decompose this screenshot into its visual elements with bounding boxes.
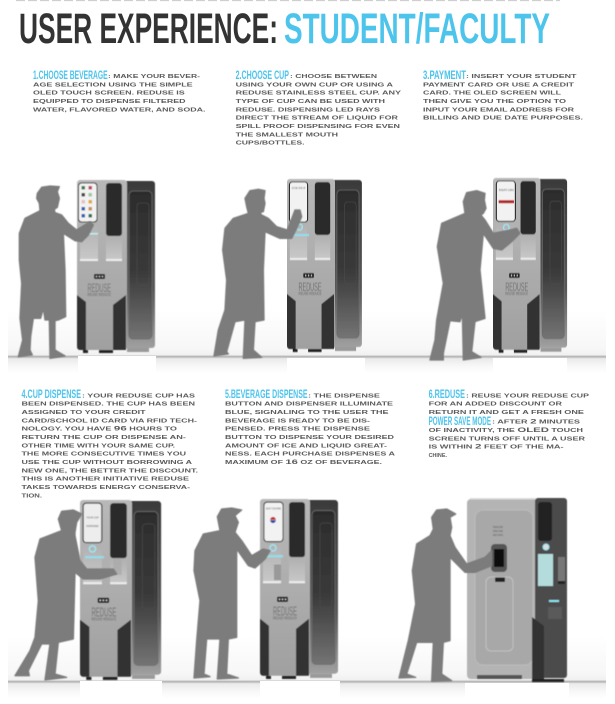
step 1 text: OLED TOUCH SCREEN. REDUSE IS (33, 91, 186, 97)
step 2 text: 2.CHOOSE CUP (236, 70, 289, 82)
title: USER EXPERIENCE: (19, 5, 278, 53)
step 5 text: BUTTON TO DISPENSE YOUR DESIRED (225, 435, 394, 441)
step 1 text: : MAKE YOUR BEVER- (108, 74, 200, 80)
step 4 text: OTHER TIME WITH YOUR SAME CUP. (22, 443, 176, 449)
step 4 text: TAKES TOWARDS ENERGY CONSERVA- (22, 485, 190, 491)
machine 4: YOUR CUP (86, 516, 99, 520)
step 5 text: PENSED. PRESS THE DISPENSE (225, 427, 371, 433)
person 3 silhouette (430, 191, 520, 360)
person 1 silhouette (18, 186, 93, 358)
step 3 text: : INSERT YOUR STUDENT (466, 74, 578, 80)
ground shadow row 1 (8, 310, 606, 374)
step 5 text: 5.BEVERAGE DISPENSE (225, 389, 308, 401)
step 6 text (429, 389, 590, 459)
machine 4: DISPENSED (86, 524, 99, 528)
step 4 text (22, 389, 199, 499)
step 4 text: USE THE CUP WITHOUT BORROWING A (22, 460, 192, 466)
step 2 text (236, 70, 402, 147)
machine 2: REDUSE (299, 281, 322, 294)
step 3 text: INPUT YOUR EMAIL ADDRESS FOR (423, 107, 574, 113)
step 2 text: CUPS/BOTTLES. (236, 141, 305, 147)
machine 4: REUSE·REDUCE (91, 617, 116, 623)
step 6 text: SCREEN TURNS OFF UNTIL A USER (429, 436, 585, 442)
step 6 text: 6.REDUSE (429, 389, 465, 401)
step 2 text: DIRECT THE STREAM OF LIQUID FOR (236, 116, 398, 122)
person 4 silhouette (15, 510, 117, 680)
status display (495, 577, 505, 582)
step 5 text: NESS. EACH PURCHASE DISPENSES A (225, 452, 395, 458)
person 2 silhouette (214, 189, 302, 358)
machine 2 (287, 179, 362, 352)
step 3 text: PAYMENT CARD OR USE A CREDIT (423, 82, 575, 88)
machine 5 (260, 499, 338, 679)
step 1 text: EQUIPPED TO DISPENSE FILTERED (33, 99, 186, 105)
step 2 text: SPILL PROOF DISPENSING FOR EVEN (236, 124, 400, 130)
machine 3 (493, 178, 567, 353)
card reader (491, 544, 507, 572)
machine 6: rear return view: REDUSE (493, 525, 503, 529)
step 3 text: 3.PAYMENT (423, 70, 466, 82)
machine 3: REDUSE (505, 281, 528, 294)
step 5 text: : THE DISPENSE (308, 393, 381, 399)
step 6 text: : REUSE YOUR REDUSE CUP (466, 393, 590, 399)
step 2 text: TYPE OF CUP CAN BE USED WITH (236, 99, 385, 105)
step 5 text: BLUE, SIGNALING TO THE USER THE (225, 410, 390, 416)
step 4 text: : YOUR REDUSE CUP HAS (82, 393, 196, 399)
step 5 text: AMOUNT OF ICE AND LIQUID GREAT- (225, 443, 387, 449)
step 5 text: BUTTON AND DISPENSER ILLUMINATE (225, 402, 394, 408)
step 2 text: USING YOUR OWN CUP OR USING A (236, 82, 393, 88)
machine 4: REDUSE (91, 605, 116, 619)
person 5 silhouette (194, 508, 270, 679)
step 6 text: IS WITHIN 2 FEET OF THE MA- (429, 444, 564, 451)
step 4 text: 4.CUP DISPENSE (22, 389, 81, 401)
step 4 text: RETURN THE CUP OR DISPENSE AN- (22, 435, 186, 441)
step 6 text: POWER SAVE MODE (429, 416, 491, 428)
step 4 text: NOLOGY. YOU HAVE 96 HOURS TO (22, 426, 177, 433)
step 3 text: CARD. THE OLED SCREEN WILL (423, 91, 562, 97)
step 6 text: OF INACTIVITY, THE OLED TOUCH (429, 427, 583, 434)
machine 4 (80, 500, 161, 680)
step 6 text: FOR AN ADDED DISCOUNT OR (429, 402, 562, 408)
step 1 text: WATER, FLAVORED WATER, AND SODA. (33, 107, 206, 113)
step 4 text: THIS IS ANOTHER INITIATIVE REDUSE (22, 477, 190, 483)
step 3 text: BILLING AND DUE DATE PURPOSES. (423, 116, 584, 122)
icon: soda logo (270, 517, 276, 523)
step 4 text: ASSIGNED TO YOUR CREDIT (22, 410, 147, 416)
ground shadow row 2 (8, 635, 606, 699)
step 2 text: THE SMALLEST MOUTH (236, 132, 338, 138)
step 5 text: BEVERAGE IS READY TO BE DIS- (225, 418, 370, 424)
step 6 text: RETURN IT AND GET A FRESH ONE (429, 410, 585, 416)
machine 1 (77, 180, 155, 353)
machine 3: REUSE·REDUCE (505, 291, 528, 296)
step 4 text: BEEN DISPENSED. THE CUP HAS BEEN (22, 402, 195, 408)
machine 6: rear return view: RETURN (493, 533, 503, 537)
step 3 text (423, 70, 584, 122)
step 5 text: MAXIMUM OF 16 OZ OF BEVERAGE. (225, 459, 383, 466)
step 2 text: REDUSE STAINLESS STEEL CUP. ANY (236, 91, 402, 97)
step 4 text: TION. (22, 493, 43, 499)
step 2 text: : CHOOSE BETWEEN (290, 74, 377, 80)
step 1 text: AGE SELECTION USING THE SIMPLE (33, 82, 194, 88)
machine 6: rear return view (467, 498, 567, 682)
machine 2: CHOOSE YOUR CUP (292, 187, 305, 190)
machine 6: rear return view: REUSE (493, 529, 503, 533)
machine 5: ENJOY YOUR DRINK (266, 506, 281, 510)
machine 2: REUSE·REDUCE (299, 291, 322, 296)
step 6 text: : AFTER 2 MINUTES (492, 419, 581, 426)
person 6 silhouette (399, 509, 492, 681)
step 1 text (33, 70, 206, 113)
step 6 text: CHINE. (429, 453, 448, 459)
step 4 text: CARD/SCHOOL ID CARD VIA RFID TECH- (22, 418, 197, 424)
machine 5: REUSE·REDUCE (273, 616, 297, 621)
step 4 text: NEW ONE, THE BETTER THE DISCOUNT. (22, 468, 199, 474)
machine 5: REDUSE (273, 604, 297, 619)
step 2 text: REDUSE. DISPENSING LED RAYS (236, 107, 381, 113)
machine 1: REUSE·REDUCE (88, 292, 111, 297)
step 5 text (225, 389, 395, 466)
step 4 text: THE MORE CONSECUTIVE TIMES YOU (22, 452, 186, 458)
machine 1: REDUSE (88, 281, 111, 295)
step 1 text: 1.CHOOSE BEVERAGE (33, 70, 108, 82)
machine 3: INSERT CARD (499, 189, 514, 192)
step 3 text: THEN GIVE YOU THE OPTION TO (423, 99, 566, 105)
